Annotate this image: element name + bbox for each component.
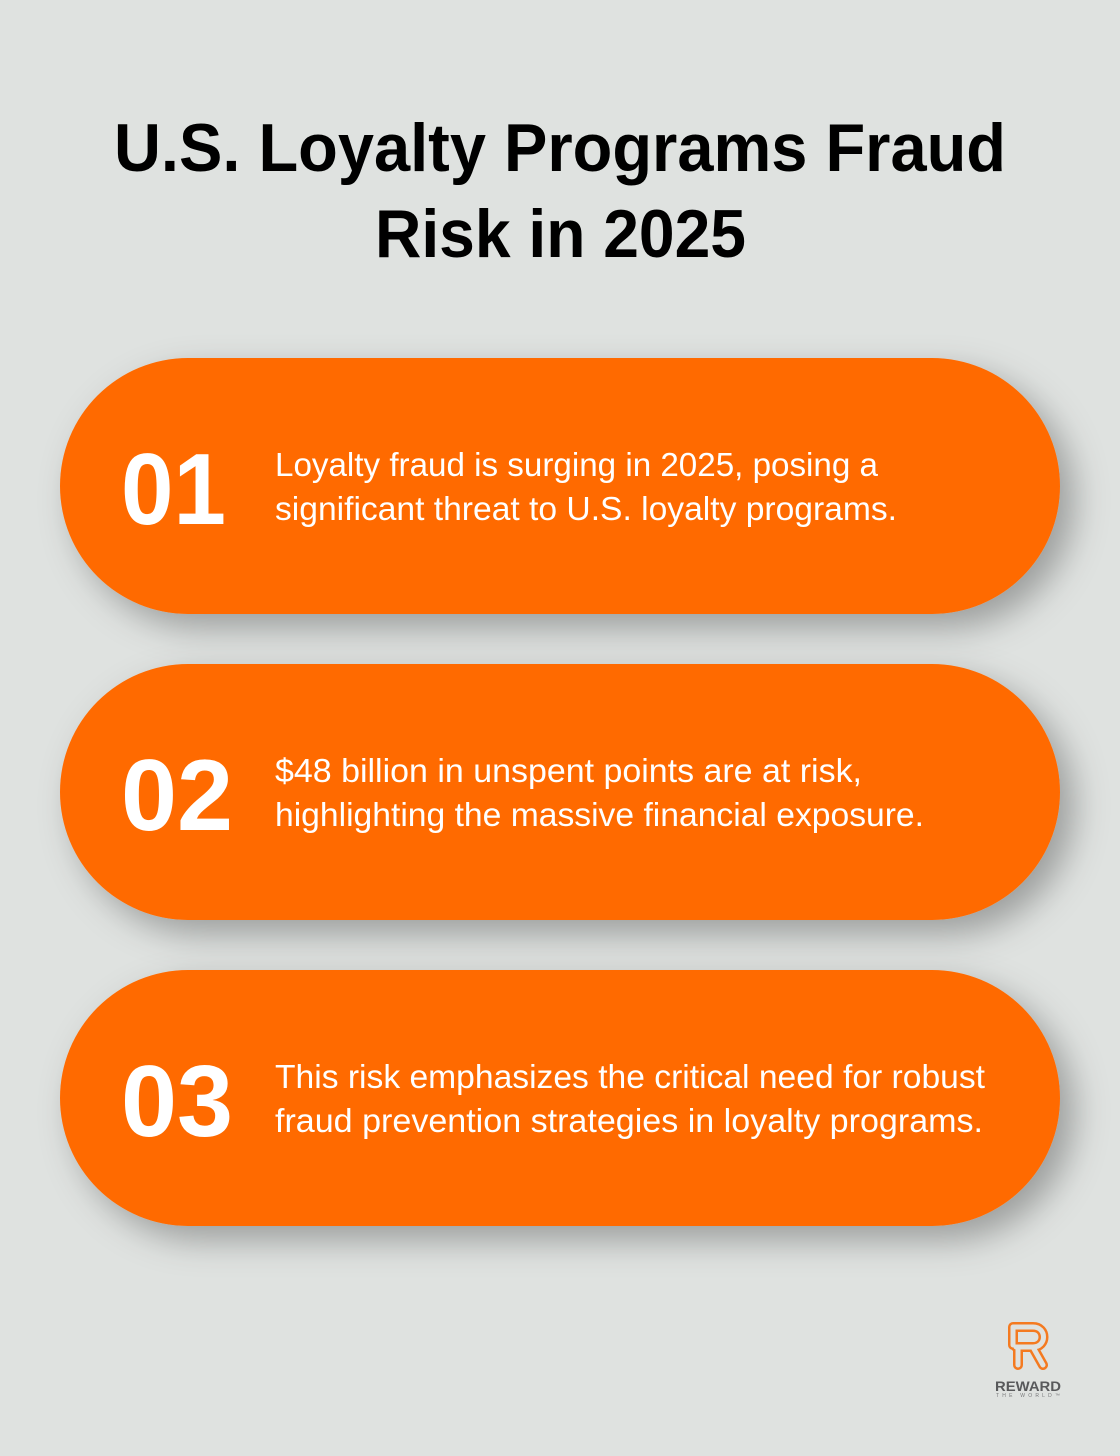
number 01: 01 (121, 434, 226, 546)
text block 01: significant threat to U.S. loyalty programs. (275, 490, 897, 527)
icon: stylised R (1013, 1327, 1044, 1365)
text block 03: fraud prevention strategies in loyalty programs. (275, 1102, 983, 1139)
title (114, 110, 1006, 272)
panel: item 03 (60, 970, 1060, 1226)
panel: item 02 (60, 664, 1060, 920)
title: Risk in 2025 (375, 196, 746, 272)
number 03: 03 (121, 1046, 233, 1158)
number 02: 02 (121, 740, 233, 852)
text block 01: Loyalty fraud is surging in 2025, posing a (275, 446, 879, 483)
text block 02: highlighting the massive financial exposure. (275, 796, 924, 833)
text block 03 (275, 1058, 985, 1139)
text block 02 (275, 752, 924, 833)
text block 01 (275, 446, 897, 527)
text block 03: This risk emphasizes the critical need for robust (275, 1058, 985, 1095)
logo: Reward the World (995, 1327, 1061, 1399)
pill background 02 (60, 664, 1060, 920)
title: U.S. Loyalty Programs Fraud (114, 110, 1006, 186)
wordmark: REWARD (995, 1378, 1061, 1394)
panel: item 01 (60, 358, 1060, 614)
pill background 01 (60, 358, 1060, 614)
tagline: THE WORLD™ (996, 1393, 1060, 1399)
pill background 03 (60, 970, 1060, 1226)
text block 02: $48 billion in unspent points are at risk, (275, 752, 862, 789)
